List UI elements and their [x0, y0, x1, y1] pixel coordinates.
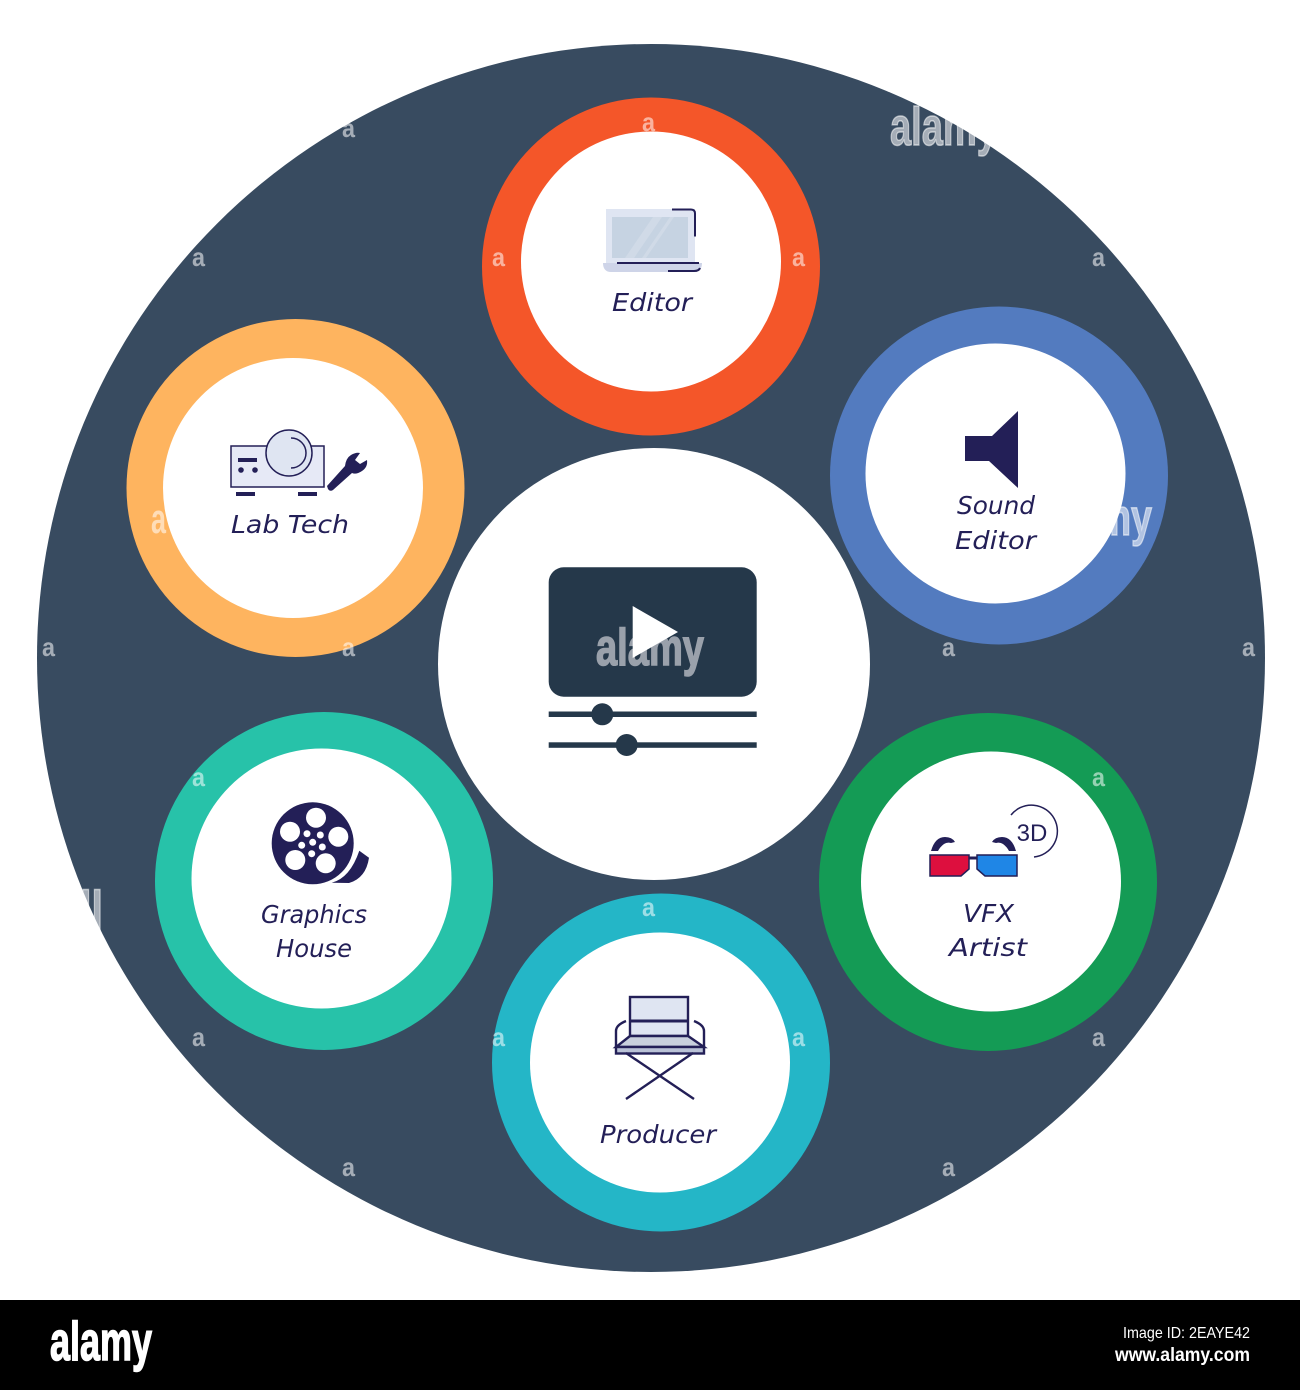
icon: laptop — [603, 209, 702, 272]
watermarks: a — [1092, 242, 1105, 272]
icon: 3D glasses: 3D — [1017, 820, 1047, 847]
panel: VFX artist — [819, 713, 1157, 1051]
watermarks: a — [792, 1022, 805, 1052]
panel: lab tech — [126, 319, 464, 657]
label: VFX Artist — [947, 899, 1028, 962]
sound editor inner circle — [866, 344, 1126, 604]
lab tech inner circle — [163, 358, 423, 618]
label: Producer: Producer — [600, 1120, 718, 1149]
icon: director chair — [616, 997, 704, 1099]
label: Sound Editor: Editor — [955, 526, 1038, 555]
watermarks: a — [642, 107, 655, 137]
watermarks: a — [942, 632, 955, 662]
producer ring — [492, 894, 830, 1232]
label: Editor: Editor — [612, 288, 694, 317]
label: Graphics House: House — [276, 934, 352, 963]
producer inner circle — [530, 932, 790, 1192]
label: Sound Editor — [955, 491, 1038, 555]
watermarks: a — [1242, 632, 1255, 662]
watermarks: a — [492, 1022, 505, 1052]
panel: center video — [438, 448, 870, 880]
label: VFX Artist: Artist — [947, 933, 1028, 962]
panel: sound editor — [830, 306, 1168, 644]
footer url: www.alamy.com — [1114, 1345, 1250, 1366]
watermarks: alamy — [890, 97, 998, 157]
icon: 3D glasses — [930, 805, 1057, 876]
watermarks: ll — [80, 879, 103, 942]
lab tech ring — [126, 319, 464, 657]
watermarks: a — [642, 892, 655, 922]
watermarks: a — [151, 495, 166, 542]
label: Lab Tech: Lab Tech — [231, 510, 349, 539]
icon: film reel — [272, 802, 369, 884]
footer image id: Image ID: 2EAYE42 — [1123, 1325, 1250, 1342]
graphics ring — [155, 712, 493, 1050]
watermarks: a — [942, 1152, 955, 1182]
footer bar — [0, 1300, 1300, 1390]
watermarks: a — [192, 242, 205, 272]
icon: video player — [549, 567, 757, 756]
watermarks: a — [792, 242, 805, 272]
watermarks: a — [342, 1152, 355, 1182]
editor ring — [482, 98, 820, 436]
watermarks: a — [192, 762, 205, 792]
watermarks: a — [492, 242, 505, 272]
watermarks: a — [342, 632, 355, 662]
label: Graphics House: Graphics — [261, 900, 367, 929]
watermarks: a — [42, 632, 55, 662]
watermarks: alamy — [1045, 489, 1152, 547]
label: Sound Editor: Sound — [957, 491, 1035, 520]
label: VFX Artist: VFX — [963, 899, 1015, 928]
watermarks: a — [192, 1022, 205, 1052]
VFX ring — [819, 713, 1157, 1051]
graphics inner circle — [192, 748, 452, 1008]
watermarks — [42, 97, 1255, 1182]
watermarks: a — [342, 113, 355, 143]
icon: video player: alamy — [596, 619, 704, 677]
editor inner circle — [521, 132, 781, 392]
center circle — [438, 448, 870, 880]
footer logo: alamy — [50, 1310, 152, 1372]
panel: producer — [492, 894, 830, 1232]
icon: projector and wrench — [231, 430, 367, 496]
label: Graphics House — [261, 900, 367, 963]
VFX inner circle — [861, 752, 1121, 1012]
watermarks: a — [1092, 762, 1105, 792]
icon: speaker — [965, 411, 1018, 488]
sound editor ring — [830, 306, 1168, 644]
panel: editor — [482, 98, 820, 436]
watermarks: a — [1092, 1022, 1105, 1052]
panel: graphics house — [155, 712, 493, 1050]
